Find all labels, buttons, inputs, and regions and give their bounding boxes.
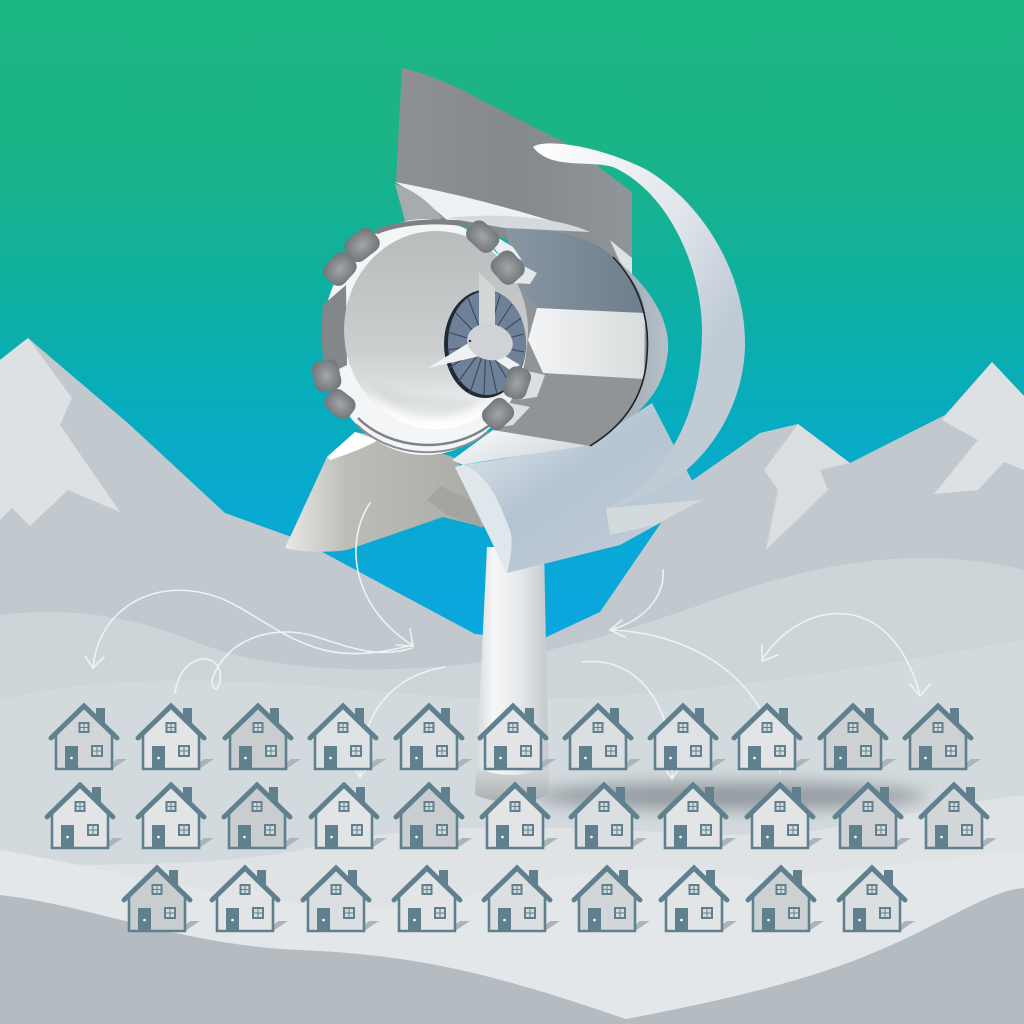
houses: row three: [124, 868, 915, 931]
blade: upper grey: [395, 68, 632, 275]
arrows: energy flow lines: [85, 503, 930, 779]
nacelle: central fan: [444, 290, 526, 398]
hills: mid-ground layers: [0, 558, 1024, 1024]
arrow: to first row: [354, 667, 445, 777]
tower: [475, 547, 549, 802]
houses: row one: [51, 706, 981, 769]
blade: lower right: [452, 403, 702, 573]
tower shadow on ground: [535, 782, 925, 810]
arrow: far right double: [762, 614, 930, 696]
houses: row two: [47, 785, 997, 848]
arrow: from left blade: [356, 503, 413, 646]
blade: lower left: [285, 432, 490, 552]
nozzles: thruster pods around the ring: [310, 217, 545, 434]
arrow: to row two: [582, 661, 678, 779]
nacelle: cylinder bands: [447, 216, 648, 446]
arrow: from right blade: [610, 570, 780, 772]
arrow: far left sweep: [85, 590, 412, 668]
arrow: loop: [175, 632, 412, 693]
blade: curved crescent: [533, 143, 745, 508]
hub: rotor blades and spinner: [428, 273, 520, 370]
wind turbine: [285, 68, 745, 802]
nacelle: rear dome: [540, 255, 668, 446]
nacelle: front ring and face: [322, 219, 528, 455]
mountains: back range: [0, 338, 1024, 1024]
